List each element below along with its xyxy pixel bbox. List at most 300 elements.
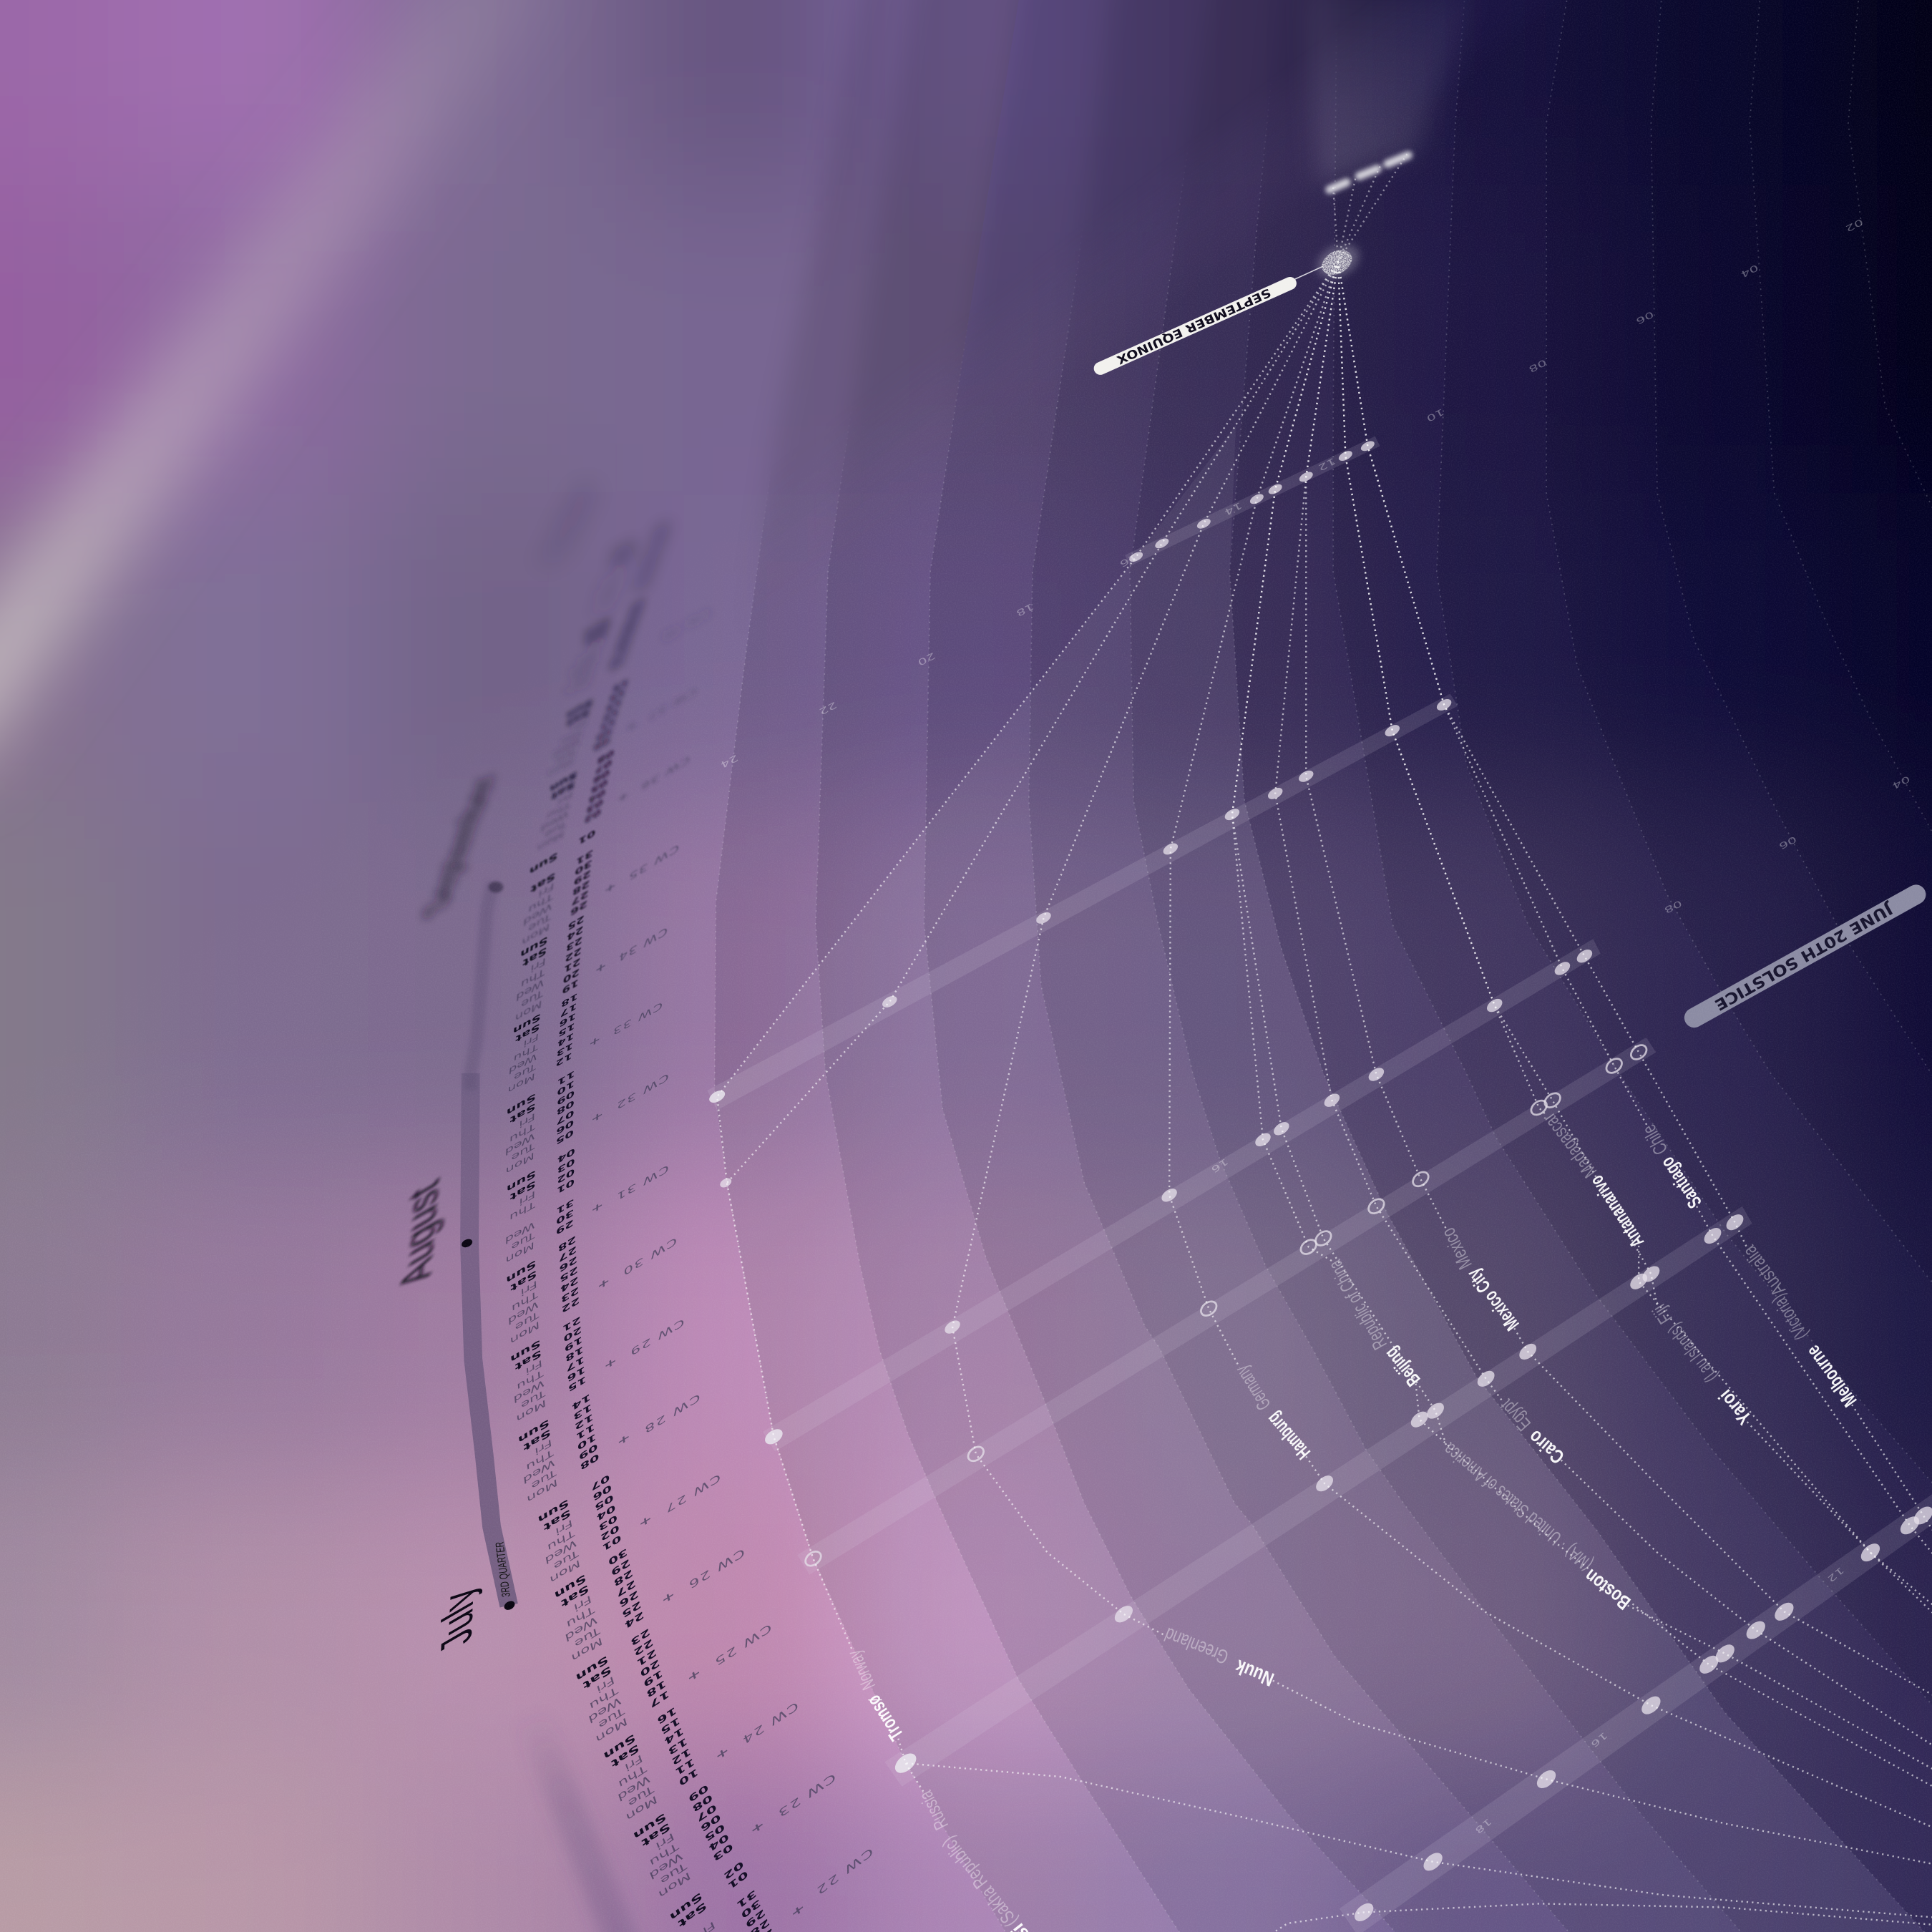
week 38: 19 (618, 625, 637, 643)
hour labels: 16 (1209, 1156, 1231, 1175)
city label: Antananarivo: Antananarivo (1585, 1171, 1648, 1252)
lighter chart region below the first dotted diagonal (717, 425, 1932, 1932)
fan of lines above equinox (1333, 154, 1407, 261)
week 31: 03 (557, 1156, 575, 1176)
week 36: + (616, 789, 630, 806)
week 28: Sun (517, 1417, 550, 1446)
week 27: 03 (597, 1512, 618, 1533)
week 38: Tue (571, 664, 596, 686)
city label: Nuuk: Nuuk (1231, 1656, 1277, 1691)
city label: Hamburg: Germany (1231, 1362, 1275, 1414)
city label: Hamburg: Hamburg (1262, 1408, 1314, 1464)
month label: September: September (413, 764, 505, 928)
week 26: Fri (572, 1593, 592, 1614)
week 33 (507, 940, 669, 1096)
week 24: 11 (674, 1755, 696, 1777)
week 34: 19 (562, 977, 579, 997)
week 26: + (660, 1588, 676, 1607)
week 27: Wed (544, 1537, 577, 1566)
week 23: 03 (711, 1841, 734, 1863)
week 36 (535, 695, 704, 854)
week 29: Wed (513, 1377, 545, 1405)
hour labels: 14 (1223, 500, 1244, 517)
city label: Beijing: Republic of China (1324, 1256, 1391, 1353)
city label: Cairo (1496, 1395, 1568, 1468)
week 34: Sat (522, 944, 547, 969)
hour labels: 22 (817, 700, 839, 717)
week 29: CW 29 (629, 1316, 685, 1359)
city label: Nuuk: Greenland (1161, 1624, 1231, 1669)
week 38: Sat (582, 625, 609, 648)
week 27: Sun (537, 1497, 570, 1525)
week 32 (504, 1013, 670, 1178)
city label: Melbourne: Melbourne (1802, 1342, 1861, 1411)
week 29: Sat (514, 1347, 542, 1372)
week 23: 06 (699, 1811, 722, 1833)
week 28: 08 (580, 1451, 600, 1472)
callout: September equinox (1101, 283, 1290, 369)
week 34: 20 (562, 966, 580, 986)
week 23: Sun (632, 1810, 668, 1842)
hour labels: 20 (916, 650, 937, 668)
city label: Yaroi: Yaroi (1714, 1385, 1756, 1429)
quarter label: 3RD QUARTER (493, 1541, 513, 1598)
week 26: 30 (608, 1546, 628, 1567)
week 37: 10 (595, 725, 615, 743)
week 32: Wed (505, 1130, 535, 1158)
week 32: CW 32 (615, 1070, 669, 1113)
week 33: 18 (561, 990, 578, 1010)
glow fan above the equinox (1304, 0, 1476, 185)
week 35: 01 (578, 827, 596, 847)
week 24: Wed (616, 1772, 651, 1804)
city label: Cairo: Cairo (1524, 1426, 1568, 1468)
week 29: 16 (567, 1363, 586, 1384)
week 39: Tue (596, 585, 621, 607)
week 34: Thu (520, 965, 546, 990)
week 27: Thu (547, 1526, 576, 1553)
week 24: + (714, 1744, 731, 1764)
week 30: 24 (560, 1274, 579, 1294)
week 38: 21 (625, 606, 644, 624)
city label: Hamburg (1231, 1362, 1314, 1464)
week 31: Sat (509, 1178, 536, 1203)
week 34: Mon (514, 997, 542, 1024)
week 24: Mon (625, 1793, 659, 1824)
week 39: Sun (609, 537, 639, 561)
week 25: + (686, 1666, 703, 1686)
week 31: CW 31 (615, 1162, 669, 1204)
week 36: Tue (544, 817, 568, 840)
week 28: + (617, 1430, 631, 1450)
week 38: 17 (611, 645, 630, 663)
city label: Yaroi: (Lau Islands) (1663, 1319, 1722, 1387)
strip: hour row 1 with city dots (707, 693, 1458, 1110)
week 31: + (591, 1199, 603, 1217)
week 30: 22 (561, 1294, 580, 1314)
city label: Mexico City: Mexico City (1462, 1264, 1523, 1335)
week 37: Fri (570, 716, 588, 734)
week 37: Sat (565, 706, 592, 729)
week 23: Sat (640, 1820, 672, 1849)
week 39 (587, 518, 673, 620)
week 24: Sat (610, 1742, 640, 1770)
week 34: 21 (564, 955, 581, 975)
week 33: 17 (560, 1000, 577, 1020)
week 26: 24 (624, 1609, 645, 1631)
week 37: 11 (598, 716, 618, 733)
week 36: CW 36 (639, 753, 691, 793)
week 35: Wed (522, 900, 552, 927)
hour labels: 24 (719, 753, 740, 770)
week 29: 18 (565, 1344, 584, 1364)
week 25: 22 (633, 1636, 655, 1658)
week 36: Fri (557, 788, 574, 807)
week 29: Tue (520, 1387, 547, 1411)
week 35: Sat (530, 869, 556, 895)
week 39: 23 (632, 577, 651, 595)
week 33: 12 (555, 1050, 572, 1069)
week 25: Tue (597, 1704, 626, 1732)
week 23: 09 (687, 1782, 710, 1804)
week 23: 05 (703, 1821, 726, 1843)
dotted curve: Santiago (1338, 261, 1932, 1571)
week 22: Sun (668, 1890, 704, 1923)
diagonal light streak (0, 0, 517, 751)
week 27: 01 (602, 1532, 622, 1553)
week 37: Mon (546, 755, 575, 780)
month marker dots (460, 882, 517, 1611)
strip: solstice row with ring markers (797, 1038, 1656, 1575)
week 31: Fri (519, 1188, 536, 1208)
week 24: 12 (670, 1745, 693, 1767)
hour labels: 12 (1317, 456, 1337, 473)
week 24: 10 (678, 1766, 700, 1787)
week 36: 03 (585, 796, 604, 816)
week 28: Wed (522, 1456, 555, 1486)
week 23: 04 (707, 1831, 730, 1853)
hour labels: 18 (1473, 1816, 1494, 1836)
hour labels: 08 (1663, 898, 1684, 916)
week 29: Sun (509, 1337, 541, 1365)
week 36: Sun (549, 769, 578, 794)
week 34: Fri (530, 955, 547, 975)
week 22: 29 (744, 1906, 766, 1930)
week 35: Sun (529, 849, 558, 877)
week 33: 15 (558, 1020, 575, 1040)
week 38: Sun (582, 615, 613, 640)
week 30: CW 30 (623, 1234, 677, 1279)
hour labels: 16 (1118, 552, 1139, 570)
week 24 (602, 1638, 800, 1824)
week 35: Tue (527, 909, 552, 934)
week 37: 14 (608, 686, 628, 704)
week 31: 04 (557, 1146, 575, 1165)
week 35: 30 (575, 857, 592, 877)
week 35: 29 (573, 867, 592, 887)
week 25: Wed (587, 1694, 623, 1725)
week 30: Mon (509, 1319, 540, 1347)
equinox marker (1312, 238, 1365, 285)
week 36: 08 (596, 747, 615, 766)
week 31: 02 (557, 1166, 575, 1186)
week 27 (537, 1411, 721, 1586)
week 25: 20 (639, 1657, 661, 1679)
week 26: CW 26 (687, 1546, 746, 1592)
hour labels: 02 (1844, 217, 1865, 234)
week 33: Mon (507, 1070, 536, 1096)
week 29: + (604, 1355, 618, 1372)
week 38: Mon (562, 674, 592, 698)
week 27: 05 (594, 1492, 614, 1513)
week 26: Sun (553, 1571, 587, 1602)
week 35 (520, 771, 688, 948)
week 31: Wed (505, 1219, 535, 1246)
week 32: 08 (557, 1098, 575, 1117)
week 32: 09 (557, 1088, 575, 1108)
week 36: Mon (536, 827, 565, 853)
week 39: 29 (654, 518, 673, 536)
week 24: CW 24 (740, 1699, 800, 1747)
week 34: 24 (567, 923, 584, 943)
week 33: Thu (513, 1040, 540, 1064)
week 35: + (604, 879, 617, 897)
week 30 (505, 1174, 677, 1347)
week 37: Wed (551, 736, 582, 761)
week 29: 19 (564, 1334, 583, 1354)
connector from equinox label (1294, 266, 1323, 280)
hour labels: 12 (1825, 1565, 1846, 1585)
week 37: + (624, 718, 639, 735)
week 23: + (748, 1818, 766, 1838)
week 34: 25 (567, 913, 585, 932)
week 23: Mon (657, 1870, 692, 1901)
city label: Santiago: Chile (1637, 1121, 1672, 1158)
city label: Beijing (1324, 1256, 1425, 1391)
week 28 (517, 1330, 701, 1508)
hour labels (719, 217, 1912, 1836)
week 33: Wed (508, 1050, 537, 1076)
week 38: Thu (576, 645, 602, 668)
dotted curve: Hamburg (1169, 261, 1932, 1833)
week 36: 07 (594, 757, 613, 776)
week 35: Fri (538, 880, 555, 899)
week 22 (668, 1782, 877, 1932)
week 22: + (789, 1901, 806, 1921)
city label: Nuuk (1161, 1624, 1277, 1691)
week 38 (562, 549, 732, 698)
week 24: Thu (617, 1762, 648, 1790)
week 26: 27 (615, 1577, 637, 1599)
week 27: 02 (600, 1522, 620, 1543)
week 26: Mon (570, 1634, 604, 1664)
hour labels: 06 (1634, 309, 1656, 327)
week 35: 31 (575, 847, 594, 867)
week 25: 19 (642, 1667, 664, 1689)
week 33: 16 (559, 1010, 577, 1030)
week 36: Sat (550, 778, 576, 802)
week 39: Thu (601, 566, 628, 589)
city label: Melbourne (1738, 1241, 1861, 1411)
strip: hour row 4 with city dots (884, 1206, 1752, 1787)
week 32: Fri (519, 1111, 535, 1130)
week 23: Thu (648, 1840, 680, 1869)
city label: Melbourne: Australia (1738, 1241, 1790, 1300)
week 31: Tue (511, 1229, 535, 1253)
week 25: Sat (582, 1664, 613, 1692)
week 36: 05 (590, 777, 608, 796)
week 29: 20 (563, 1324, 582, 1344)
week 34: CW 34 (618, 924, 668, 964)
week 32: 11 (557, 1068, 575, 1088)
week 29: Mon (516, 1397, 547, 1424)
week 28: 14 (571, 1391, 591, 1412)
week 30: 25 (560, 1264, 578, 1284)
week 39: 24 (635, 567, 655, 585)
week 31: 29 (556, 1217, 574, 1236)
week 31: 31 (556, 1196, 574, 1216)
week 39: 28 (650, 528, 670, 546)
week 29: Fri (525, 1357, 543, 1377)
week 23: Wed (648, 1850, 684, 1882)
week 28: 10 (577, 1431, 597, 1452)
week 24: 16 (655, 1704, 678, 1726)
week 33: Sun (512, 1011, 542, 1036)
week 22: CW 22 (814, 1845, 874, 1898)
week 36: Thu (546, 797, 572, 822)
dotted curve: Melbourne (1338, 261, 1932, 1553)
week 37: 12 (602, 706, 621, 723)
week 26: 29 (610, 1556, 631, 1578)
week 38: CW 38 (661, 606, 712, 643)
week 27: Sat (543, 1507, 572, 1533)
week 28: Sat (523, 1427, 552, 1453)
hour labels: 10 (1425, 406, 1446, 424)
week 25: 18 (645, 1677, 668, 1699)
week 31: 01 (557, 1176, 575, 1196)
week 39: Wed (594, 576, 624, 600)
week 25: CW 25 (713, 1621, 773, 1669)
week 24: Fri (623, 1752, 644, 1774)
week 25: Fri (595, 1674, 616, 1695)
week 32: Tue (511, 1139, 535, 1163)
week 33: Fri (523, 1030, 540, 1049)
week 35: 28 (572, 878, 590, 897)
city label: Yaroi (1648, 1301, 1756, 1429)
week 33: 14 (557, 1030, 575, 1049)
week 30: Sun (506, 1257, 537, 1286)
week 39: 27 (647, 537, 665, 556)
week 29: 15 (567, 1373, 587, 1394)
week 26: Thu (565, 1603, 596, 1631)
week 37: Thu (558, 725, 586, 749)
week 27: CW 27 (664, 1471, 721, 1516)
week 23: Fri (654, 1830, 676, 1852)
week 31 (504, 1091, 670, 1267)
week 37 (545, 628, 718, 780)
calendar columns (504, 518, 877, 1932)
third quarter bar (469, 882, 513, 1606)
dotted curve: Boston (1232, 261, 1932, 1777)
week 26: Wed (564, 1614, 598, 1644)
week 29 (509, 1257, 685, 1425)
week 26: 25 (621, 1599, 643, 1620)
week 23: 08 (691, 1792, 714, 1814)
week 22: Sat (676, 1900, 708, 1931)
week 30: 26 (559, 1254, 577, 1274)
city label: Antananarivo (1538, 1109, 1648, 1252)
week 32: Sun (507, 1091, 536, 1118)
week 25: Thu (588, 1684, 620, 1712)
week 26: 28 (613, 1567, 634, 1589)
city label: Tiksi: Russia (914, 1787, 952, 1833)
callout: June 20th solstice: JUNE 20TH SOLSTICE (1712, 899, 1897, 1014)
week 24: 13 (667, 1735, 688, 1757)
week 24: 14 (663, 1724, 685, 1747)
week 32: 05 (556, 1127, 574, 1146)
dotted curve: Tiksi (727, 261, 1932, 1932)
strip: hour row 2 with city dots (762, 939, 1601, 1451)
week 25: Mon (595, 1715, 629, 1745)
hour labels: 04 (1739, 263, 1760, 280)
week 31: Sun (507, 1168, 536, 1195)
city label: Tromso: Norway (843, 1647, 879, 1693)
week 39: Sat (609, 547, 635, 570)
week 32: 10 (557, 1078, 575, 1098)
week 34 (514, 861, 674, 1024)
week 23: CW 23 (776, 1770, 837, 1820)
week 27: 06 (592, 1482, 613, 1503)
week 39: Mon (587, 595, 617, 620)
week 30: 28 (558, 1233, 577, 1254)
week 32: 06 (556, 1117, 574, 1137)
week 38: Fri (587, 635, 605, 653)
week 30: Fri (520, 1278, 537, 1298)
week 34: 22 (565, 945, 582, 965)
strip: hour row 5 with city dots (1340, 1493, 1932, 1932)
week 34: 23 (565, 934, 583, 954)
week 26: Sat (560, 1582, 590, 1610)
week 39: Fri (613, 557, 631, 575)
week 30: 23 (561, 1284, 580, 1304)
week 35: Thu (528, 889, 555, 915)
second quarter bar, out of focus (530, 1712, 628, 1932)
week 28: 09 (578, 1441, 598, 1462)
month label: October: October (532, 475, 605, 572)
week 37: 15 (611, 676, 630, 695)
week 30: Thu (511, 1287, 539, 1314)
week 33: + (588, 1033, 601, 1050)
week 25: Sun (575, 1653, 610, 1684)
week 30: Tue (514, 1308, 540, 1333)
week 29: Thu (517, 1367, 545, 1392)
dotted curve: Beijing (1232, 261, 1932, 1794)
city label: Tiksi: (Sakha Republic) (937, 1833, 1022, 1931)
month label: August: August (392, 1172, 448, 1298)
callout: September equinox: SEPTEMBER EQUINOX (1114, 286, 1273, 367)
hour labels: 08 (1527, 357, 1548, 375)
week 22: 31 (735, 1888, 758, 1911)
week 28: Thu (525, 1446, 555, 1473)
week 36: Wed (540, 808, 570, 834)
week 28: Tue (531, 1466, 557, 1492)
week 35: 27 (571, 888, 589, 908)
city label: Tromso (843, 1647, 907, 1745)
week 36: 04 (587, 786, 606, 806)
dotted curve: Yaroi (1338, 261, 1932, 1626)
week 32: + (591, 1108, 603, 1126)
week 23 (631, 1712, 837, 1901)
